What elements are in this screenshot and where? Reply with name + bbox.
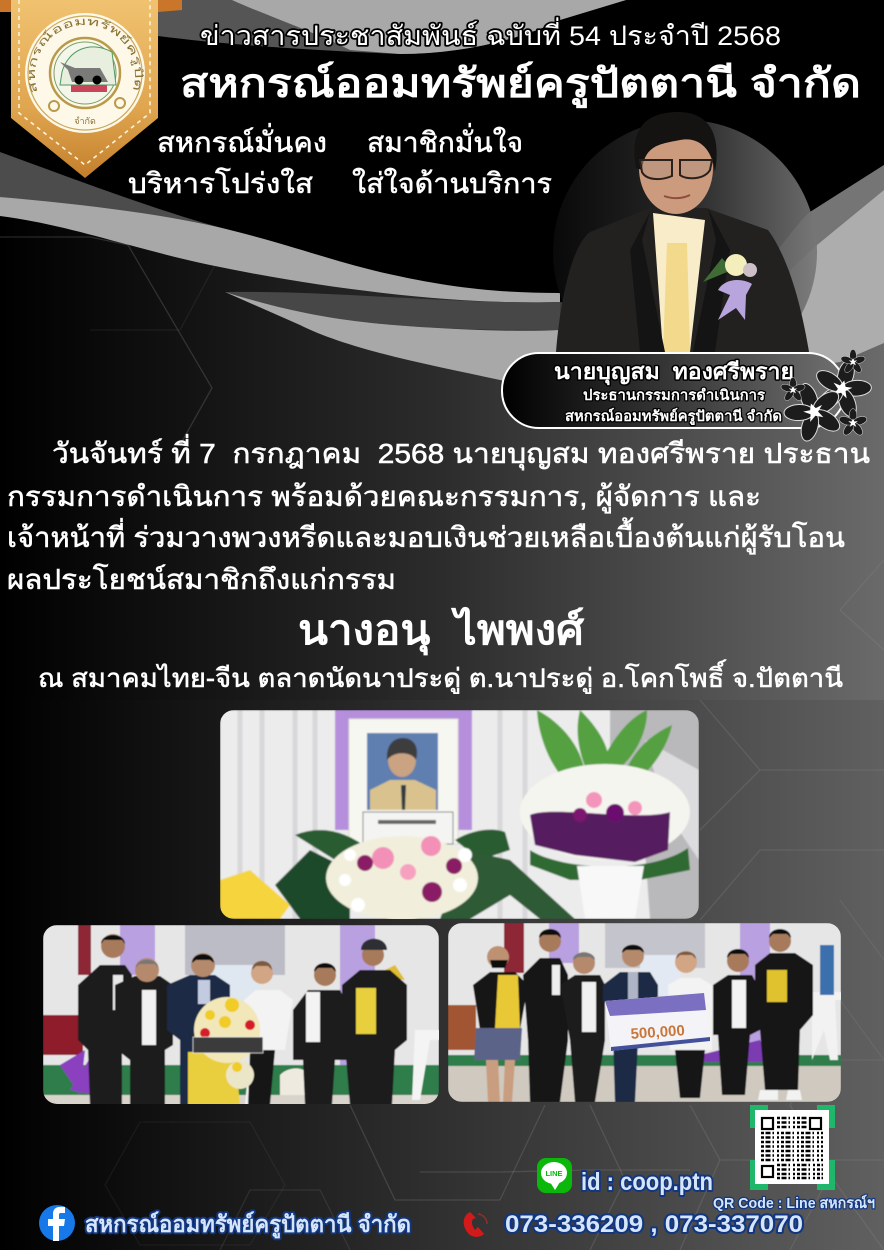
icon: corsage — [703, 254, 757, 320]
logo seal — [25, 13, 145, 133]
cheque amount: 500,000 — [630, 1022, 685, 1043]
deceased name: นางอนุ ไพพงศ์ — [298, 606, 585, 656]
news paragraph: ผลประโยชน์สมาชิกถึงแก่กรรม — [7, 563, 396, 595]
circle behind portrait — [553, 120, 817, 384]
icon: flowers — [775, 349, 879, 450]
icon: phone — [464, 1212, 487, 1237]
news paragraph: เจ้าหน้าที่ ร่วมวางพวงหรีดและมอบเงินช่วยเหลือเบื้องต้นแก่ผู้รับโอน — [7, 517, 845, 555]
icon: line: LINE — [545, 1169, 563, 1178]
group people — [78, 934, 407, 1105]
slogan left 2: บริหารโปร่งใส — [128, 167, 313, 199]
newsletter line: ข่าวสารประชาสัมพันธ์ ฉบับที่ 54 ประจำปี 2568 — [200, 17, 781, 51]
slogan right 1: สมาชิกมั่นใจ — [367, 123, 523, 158]
role line 2: สหกรณ์ออมทรัพย์ครูปัตตานี จำกัด — [565, 407, 782, 425]
wreath — [188, 997, 263, 1105]
news paragraph — [7, 434, 870, 595]
QR code — [750, 1105, 835, 1190]
slogan right 2: ใส่ใจด้านบริการ — [352, 167, 552, 199]
name: นายบุญสม ทองศรีพราย — [554, 359, 794, 386]
news paragraph: กรรมการดำเนินการ พร้อมด้วยคณะกรรมการ, ผู้จัดการ และ — [7, 481, 761, 514]
phone numbers: 073-336209 , 073-337070 — [505, 1211, 803, 1238]
QR caption: QR Code : Line สหกรณ์ฯ — [713, 1194, 875, 1212]
slogan left 1: สหกรณ์มั่นคง — [157, 123, 327, 158]
photo: group with wreath — [43, 925, 440, 1105]
facebook name: สหกรณ์ออมทรัพย์ครูปัตตานี จำกัด — [85, 1211, 411, 1239]
name plate — [502, 353, 845, 428]
role line 1: ประธานกรรมการดำเนินการ — [583, 387, 765, 404]
venue: ณ สมาคมไทย-จีน ตลาดนัดนาประดู่ ต.นาประดู่ อ.โคกโพธิ์ จ.ปัตตานี — [38, 659, 843, 694]
icon: facebook — [39, 1205, 75, 1241]
ribbon with logo — [0, 0, 182, 178]
top swoosh shapes — [0, 0, 884, 395]
group people — [473, 929, 813, 1102]
line id: id : coop.ptn — [581, 1168, 713, 1196]
main title: สหกรณ์ออมทรัพย์ครูปัตตานี จำกัด — [180, 61, 861, 108]
photo: memorial portrait and flowers — [220, 710, 699, 920]
icon: line — [537, 1158, 572, 1193]
portrait: chairman — [556, 112, 809, 352]
seal text: จำกัด — [74, 116, 96, 126]
news paragraph: วันจันทร์ ที่ 7 กรกฎาคม 2568 นายบุญสม ทองศรีพราย ประธาน — [52, 434, 870, 471]
cheque — [605, 993, 710, 1051]
photo: group with cheque — [448, 923, 842, 1102]
